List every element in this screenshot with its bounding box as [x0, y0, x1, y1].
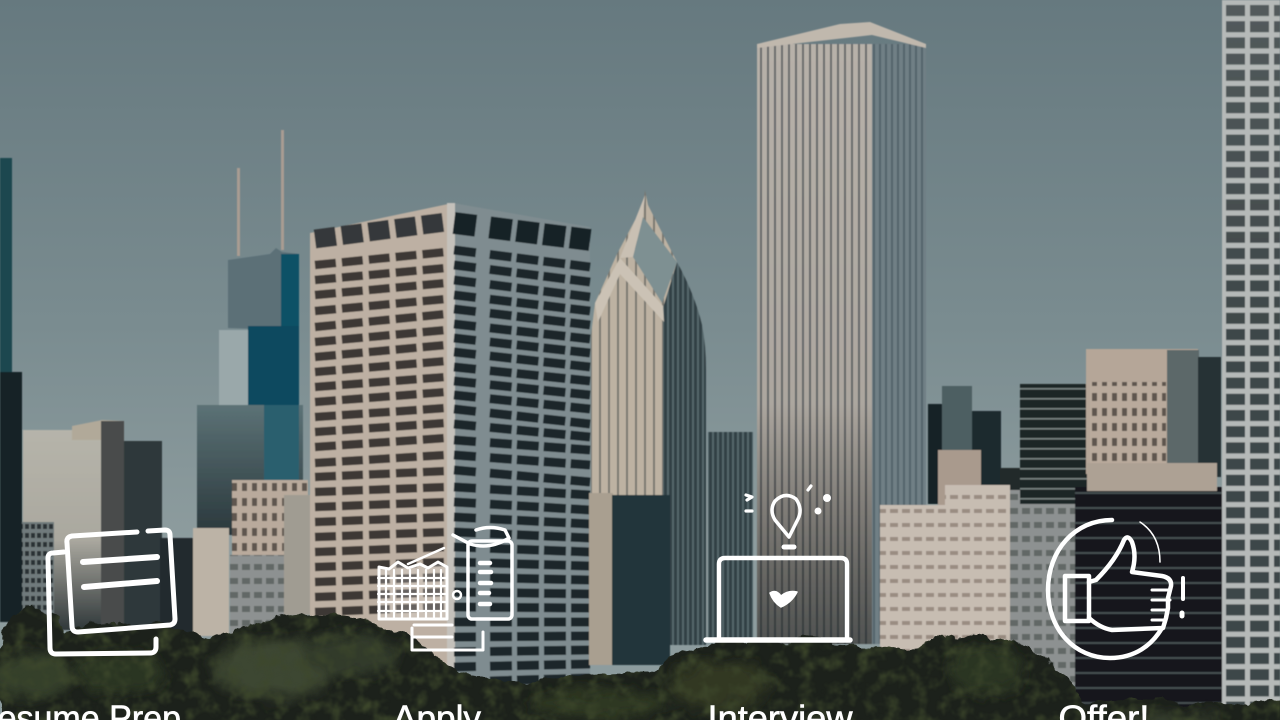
- tree canopy: dark base: [0, 604, 1280, 720]
- building: far left dark tower: [0, 158, 22, 622]
- icon: stacked documents: [48, 530, 175, 654]
- building: dark banded tower right: [1075, 463, 1222, 717]
- icon: thumbs up in circle: [1048, 520, 1183, 658]
- step 4: offer: [1048, 520, 1183, 720]
- tree canopy: olive highlights: [0, 635, 1220, 720]
- building: tan mid-rise in front right: [880, 450, 1076, 685]
- building: tan grid block: [1086, 349, 1221, 477]
- building: main grid tower: [310, 203, 590, 700]
- building: crown-topped tower: [591, 190, 706, 645]
- windows: right face top floor: [454, 223, 590, 240]
- windows: left face: [315, 252, 446, 612]
- icon: keyboard, phone and paper: [378, 528, 512, 650]
- building: dark teal block in front of crown tower: [589, 493, 670, 665]
- sparks: [746, 486, 811, 511]
- paper: [412, 625, 483, 650]
- step 3: interview: [706, 486, 853, 720]
- building: Willis Tower with antennas: [197, 130, 303, 535]
- building: tall white tower: [757, 22, 926, 644]
- windows: left face top floor: [315, 222, 446, 239]
- building: dark towers behind tan block: [928, 386, 1024, 504]
- step 1: resume prep: [0, 530, 181, 720]
- light bulb: [772, 495, 800, 537]
- building: pale block with dark annex: [22, 420, 194, 633]
- phone: [453, 528, 512, 619]
- connector line: [408, 548, 444, 564]
- keyboard: [378, 562, 447, 619]
- step 2: apply: [378, 528, 512, 720]
- windows: right face: [454, 250, 590, 682]
- building: banded dark block: [1020, 384, 1087, 504]
- heart: [770, 592, 797, 607]
- building: tan and grey mid-rise cluster: [193, 480, 310, 637]
- laptop: [719, 558, 847, 637]
- building: dark striped block: [708, 432, 753, 642]
- building: tall grid tower right edge: [1222, 0, 1280, 706]
- tree line: [0, 604, 1280, 720]
- icon: laptop with heart and light bulb: [706, 486, 850, 640]
